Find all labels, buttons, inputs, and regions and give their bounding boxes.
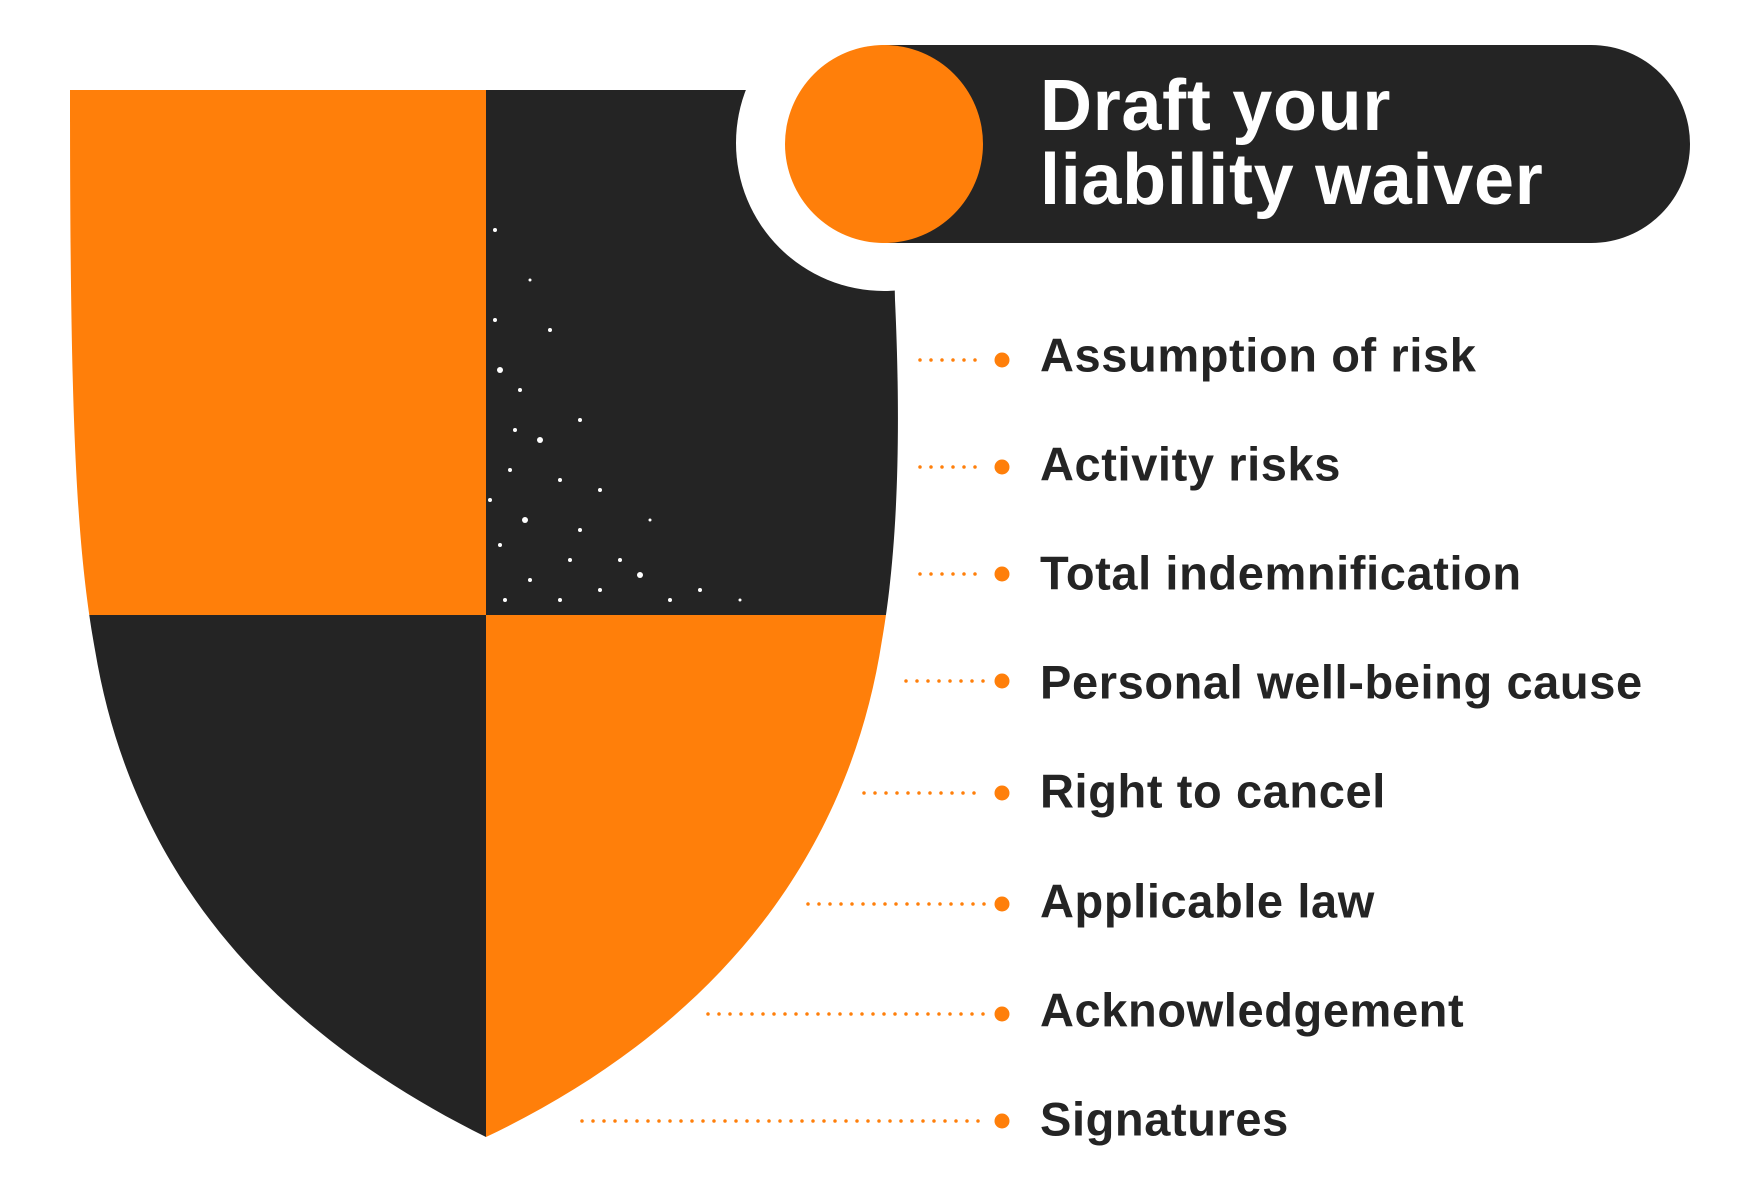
item: Personal well-being cause: Personal well-being cause bbox=[1040, 656, 1643, 708]
title text: liability waiver bbox=[1040, 140, 1543, 220]
title text bbox=[1040, 66, 1543, 220]
quadrant: bottom-left dark bbox=[89, 615, 486, 1137]
item: Signatures: Signatures bbox=[1040, 1092, 1289, 1146]
connector 4 bbox=[906, 674, 1010, 688]
quadrant: top-left orange bbox=[70, 90, 486, 615]
quadrant: bottom-right orange bbox=[486, 615, 886, 1137]
shield graphic bbox=[70, 90, 898, 1137]
title pill bbox=[790, 45, 1690, 243]
connector 8 bbox=[582, 1114, 1010, 1128]
connector 5 bbox=[864, 786, 1010, 800]
connector 7 bbox=[708, 1006, 1010, 1022]
item: Total indemnification: Total indemnification bbox=[1040, 546, 1522, 600]
item: Activity risks: Activity risks bbox=[1040, 438, 1341, 490]
item: Assumption of risk: Assumption of risk bbox=[1040, 328, 1476, 382]
icon: orange circle bbox=[785, 45, 983, 243]
connector 6 bbox=[808, 896, 1010, 912]
white cutout around circle bbox=[736, 0, 1032, 291]
connector 2 bbox=[920, 460, 1010, 474]
item: Applicable law: Applicable law bbox=[1040, 874, 1375, 928]
item: Acknowledgement: Acknowledgement bbox=[1040, 984, 1464, 1036]
connector 1 bbox=[920, 352, 1010, 368]
connector 3 bbox=[920, 566, 1010, 582]
quadrant: top-right dark speckled bbox=[486, 90, 898, 615]
title text: Draft your bbox=[1040, 66, 1391, 146]
item: Right to cancel: Right to cancel bbox=[1040, 764, 1386, 818]
